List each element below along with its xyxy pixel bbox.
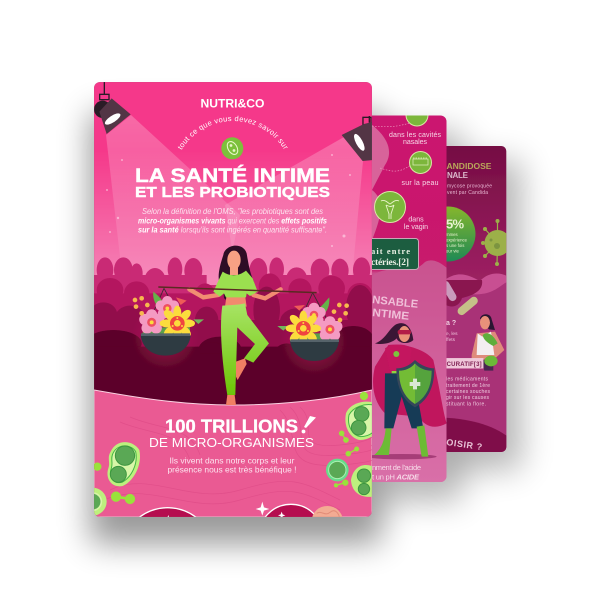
heading: responsable: NTIME xyxy=(372,307,410,323)
woman: arms xyxy=(189,289,281,298)
text: candidose intro: mycose provoquée xyxy=(447,184,492,190)
text: side note xyxy=(446,332,458,341)
text: candidose intro xyxy=(447,184,492,196)
text: side note: e, les xyxy=(446,331,458,337)
text: choisir: OISIR ? xyxy=(446,437,483,452)
cloud xyxy=(446,280,482,306)
wavy separator xyxy=(372,260,447,482)
microbe: left large xyxy=(107,442,140,486)
microbe: right lower xyxy=(351,465,373,497)
text: dans le vagin: dans xyxy=(408,216,424,224)
statistic circle: expérience xyxy=(446,238,468,242)
text: dans le vagin: le vagin xyxy=(404,224,428,231)
text: dans les cavités nasales: dans les cavités xyxy=(389,132,442,139)
woman: hair xyxy=(219,246,254,300)
statistic circle: mmes xyxy=(446,232,458,237)
main card xyxy=(94,82,372,517)
back card: candidose xyxy=(446,146,506,452)
foot and leg tip xyxy=(226,395,236,405)
sparkles xyxy=(106,154,351,247)
text: side note: ffets xyxy=(446,337,456,343)
right hanging basket xyxy=(277,293,349,361)
green sign xyxy=(372,238,419,270)
icon: nose badge xyxy=(406,116,428,126)
text: definition: micro-organismes vivants qui exercent des effets positifs xyxy=(138,216,327,226)
statistic circle: 5 % xyxy=(446,216,464,232)
text: curative paragraph: certaines souches xyxy=(446,389,490,395)
text: dans le vagin xyxy=(404,216,428,231)
crowd: darkest row xyxy=(85,326,374,413)
pink cloud separator xyxy=(446,274,506,294)
all cards xyxy=(94,82,506,517)
text: curative paragraph: stituant la flore. xyxy=(446,402,486,408)
illustration: crowd and woman xyxy=(85,246,374,413)
microbe: right round xyxy=(326,459,349,481)
statistic circle: s une fois xyxy=(446,243,464,248)
text: curative paragraph xyxy=(446,376,490,408)
back card: flore xyxy=(372,116,446,482)
card edge highlight xyxy=(94,82,372,517)
text: definition xyxy=(138,207,327,235)
lamp: left spotlight xyxy=(94,80,131,134)
wave pattern xyxy=(104,407,380,510)
heading: candidose xyxy=(446,163,492,178)
body silhouette xyxy=(372,125,389,240)
shield xyxy=(396,360,434,407)
statistic circle xyxy=(446,206,476,262)
bottom circle left xyxy=(121,508,214,600)
text: curved tagline: tout ce que vous devez savoir sur xyxy=(178,116,288,150)
title xyxy=(135,164,330,201)
green sign: ctéries.[2] xyxy=(371,258,409,268)
text: sur la peau: sur la peau xyxy=(402,180,439,187)
woman: top xyxy=(213,271,258,297)
text: de micro-organismes: DE MICRO-ORGANISMES xyxy=(149,435,314,450)
text: description xyxy=(168,455,296,475)
lower panel xyxy=(446,282,506,452)
heading: candidose: ANDIDOSE xyxy=(446,162,492,171)
bottom circle right xyxy=(259,504,323,569)
icon: brain xyxy=(312,506,343,534)
woman: neck and face xyxy=(227,251,241,275)
icon: exclamation mark xyxy=(302,416,316,433)
woman: pants xyxy=(221,303,269,395)
icon: uterus badge xyxy=(374,192,406,222)
green sign: ait entre xyxy=(371,246,410,256)
figure: woman with boxing gloves xyxy=(472,314,504,371)
light beams xyxy=(106,115,363,275)
basket glow xyxy=(132,303,347,375)
icon: pills xyxy=(446,281,478,316)
text: curative paragraph: traitement de 1ère xyxy=(446,383,490,389)
cape xyxy=(373,345,447,427)
text: definition: sur la santé lorsqu'ils sont ingérés en quantité suffisante". xyxy=(138,226,327,235)
title: LA SANTÉ INTIME xyxy=(135,164,330,187)
text: acid ph: nment de l'acide xyxy=(372,463,421,472)
microbe: right top xyxy=(345,402,377,440)
badge: curatif: CURATIF[3] xyxy=(447,362,482,368)
heading: responsable xyxy=(372,296,418,320)
icon: skin badge xyxy=(410,152,432,174)
microbe: left bottom xyxy=(79,488,107,516)
heading: candidose: NALE xyxy=(447,171,469,180)
sparkle xyxy=(256,502,269,516)
title: ET LES PROBIOTIQUES xyxy=(135,185,330,201)
lower panel xyxy=(94,390,372,517)
lamp: right spotlight xyxy=(342,116,373,161)
heading: responsable: NSABLE xyxy=(372,294,419,311)
crowd: middle row xyxy=(90,273,373,353)
crowd: back row xyxy=(90,257,373,340)
woman: balance pole xyxy=(158,287,317,293)
text: acid ph xyxy=(372,464,421,481)
text: dans les cavités nasales: nasales xyxy=(403,139,428,146)
left hanging basket xyxy=(133,288,204,356)
text: brand: NUTRI&CO xyxy=(200,99,265,111)
text: candidose intro: vent par Candida xyxy=(447,190,488,196)
text: curative paragraph: les médicaments xyxy=(446,376,488,382)
soft drop shadow xyxy=(90,112,522,544)
text: definition: Selon la définition de l'OMS, "les probiotiques sont des xyxy=(142,207,323,216)
dotted arcs xyxy=(372,123,410,172)
lime dumbbells xyxy=(93,392,368,504)
hair xyxy=(375,323,413,344)
bottom band xyxy=(446,418,506,452)
woman: midriff xyxy=(225,295,247,307)
text: 100 trillions: 100 TRILLIONS xyxy=(165,417,298,437)
figure: superhero xyxy=(367,323,447,459)
woman: foot on knee xyxy=(236,358,247,380)
text: acid ph: t un pH ACIDE xyxy=(372,472,420,482)
text: question: a ? xyxy=(446,320,456,327)
text: description: présence nous est très bénéfique ! xyxy=(168,465,296,475)
text: dans les cavités nasales xyxy=(389,132,441,144)
crowd: front row xyxy=(89,285,374,390)
icon: virus xyxy=(481,219,506,266)
text: curative paragraph: gir sur les causes xyxy=(446,395,490,401)
badge: curatif xyxy=(446,358,484,368)
statistic circle: eur vie xyxy=(446,248,460,254)
text: description: Ils vivent dans notre corps et leur xyxy=(170,455,295,465)
icon: green probiotic badge xyxy=(221,137,243,159)
microbes xyxy=(79,392,377,600)
